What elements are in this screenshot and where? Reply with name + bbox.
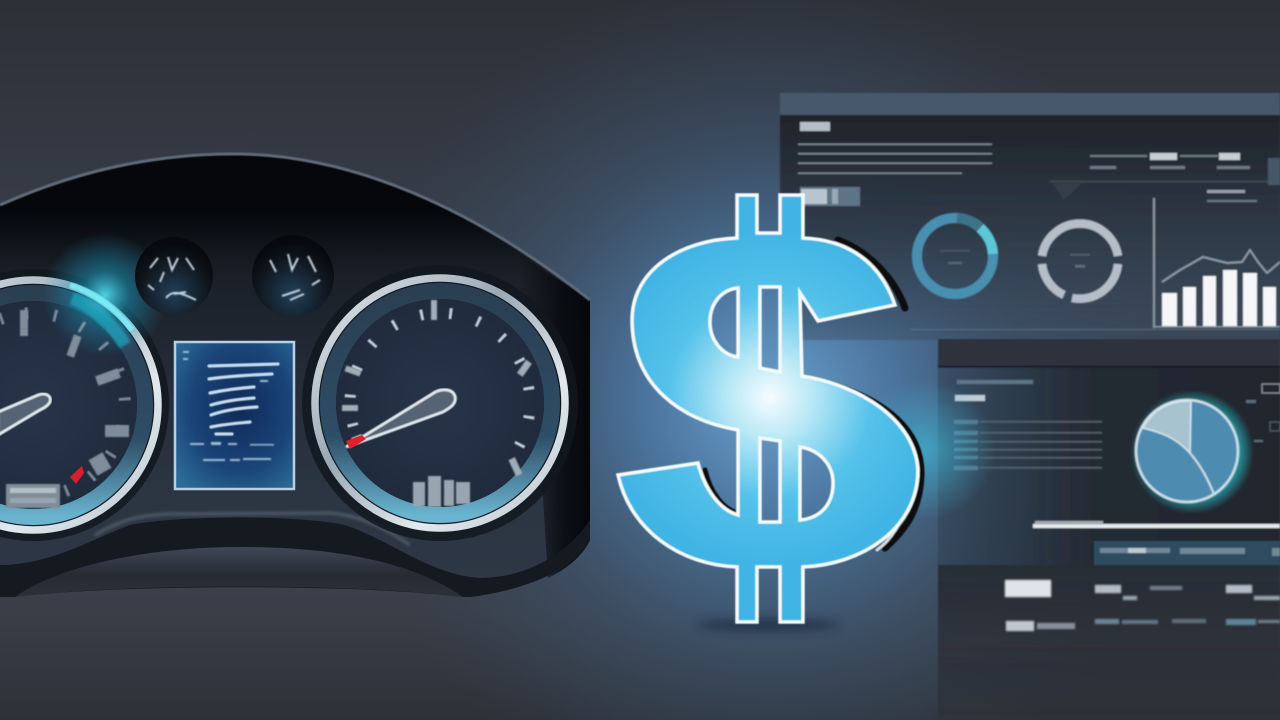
centre info screen — [175, 342, 294, 489]
list rows — [954, 420, 1102, 470]
dashboard rim — [0, 154, 590, 300]
bar and line chart — [1153, 198, 1280, 328]
panel: car dashboard — [0, 154, 590, 597]
metric strip — [1094, 541, 1280, 565]
panel label — [955, 380, 1033, 401]
right side shadow — [520, 255, 590, 578]
ticks — [0, 305, 133, 505]
screen text — [183, 351, 274, 461]
odometer blocks — [413, 476, 470, 507]
glow: beside dollar sign — [855, 380, 995, 520]
odometer blocks — [6, 484, 60, 508]
icon: dollar sign — [618, 195, 921, 622]
screen bars — [209, 364, 278, 434]
gauge: right speedometer — [302, 265, 578, 541]
panel label and text lines — [798, 122, 992, 174]
small chip — [800, 187, 860, 206]
needle — [0, 394, 50, 435]
gauge: small right dial — [252, 235, 334, 317]
gap band between screens — [938, 339, 1280, 367]
slider bar — [1033, 521, 1280, 528]
legend chips top right — [1050, 153, 1280, 202]
red marker — [70, 466, 84, 484]
needle — [346, 390, 455, 447]
under hood opening — [15, 587, 463, 597]
red marker — [346, 435, 366, 449]
footer values — [1005, 580, 1280, 631]
dollar extrusion — [705, 240, 921, 550]
gauge: left speedometer — [0, 233, 169, 541]
shadow under dollar sign — [696, 619, 840, 631]
panel: upper analytics screen — [780, 93, 1280, 367]
lower dark band — [0, 518, 590, 597]
steering hood — [15, 547, 463, 597]
ticks — [330, 293, 550, 513]
band highlight — [95, 513, 410, 545]
dashboard body — [0, 154, 590, 597]
panel: lower analytics screen — [938, 366, 1280, 720]
gauge: small left dial — [135, 237, 213, 315]
donut chart: grey — [1042, 224, 1118, 299]
pie chart — [1130, 384, 1280, 514]
donut chart: blue — [917, 218, 993, 294]
dollar body — [618, 195, 918, 622]
header strip — [780, 93, 1280, 115]
